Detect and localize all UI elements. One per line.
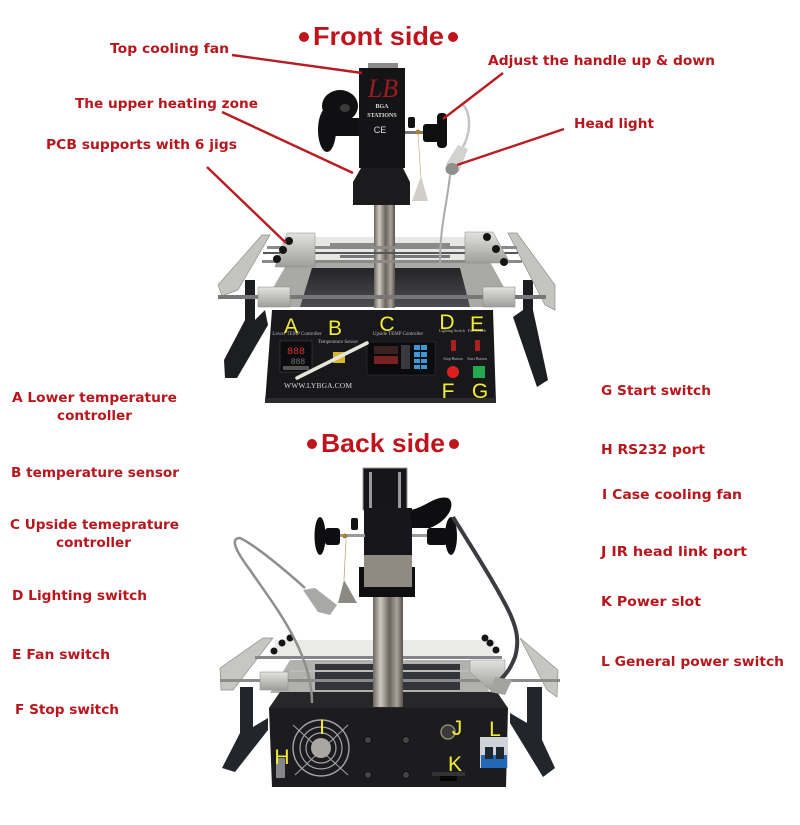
left legend: E Fan switch [12, 647, 110, 663]
front panel captions [272, 328, 487, 361]
back knob and handle right [410, 498, 457, 555]
right legend: G Start switch [601, 383, 711, 399]
front lift column pole [374, 205, 395, 308]
front letters A to G: B [328, 317, 342, 340]
right legend [600, 383, 784, 670]
callout labels: Adjust the handle up & down [488, 53, 715, 69]
front slider blocks [258, 232, 515, 307]
front panel captions: Upside TEMP Controller [373, 332, 423, 337]
front letters A to G: F [442, 380, 454, 403]
back lamp gooseneck [235, 538, 337, 703]
back letters H to L: I [319, 716, 325, 739]
lower temperature controller: 888 [287, 347, 305, 358]
front handle knob right [405, 113, 447, 148]
front panel captions: Fan Switch [468, 328, 486, 333]
back column pole [373, 587, 403, 707]
back letters H to L: L [489, 718, 501, 741]
front panel captions: Stop Button [443, 356, 463, 361]
back warning tag [338, 540, 357, 603]
front upper heating column [353, 63, 410, 205]
back letters H to L: J [452, 717, 462, 740]
upside temperature controller [367, 342, 435, 375]
lower temperature controller: 888 [291, 358, 305, 367]
title: back side: Back side [321, 428, 445, 458]
temperature sensor [297, 343, 367, 378]
callout labels: Top cooling fan [110, 41, 229, 57]
front machine [218, 63, 555, 403]
left legend [10, 390, 179, 718]
callout labels: PCB supports with 6 jigs [46, 137, 237, 153]
power socket [432, 772, 465, 781]
front letters A to G [284, 311, 488, 403]
right legend: L General power switch [601, 654, 784, 670]
cooling fan [293, 720, 349, 776]
front upper heating column: STATIONS [367, 113, 397, 119]
left legend: D Lighting switch [12, 588, 147, 604]
left legend: A Lower temperature [12, 390, 177, 406]
front letters A to G: A [284, 315, 298, 338]
right legend: I Case cooling fan [602, 487, 742, 503]
front control box [265, 310, 496, 403]
front rails and rods [218, 246, 546, 299]
front panel captions: Temperature Sensor [318, 340, 358, 345]
back IR link cable [453, 517, 517, 695]
back jig knobs [270, 634, 500, 654]
right legend: K Power slot [601, 594, 702, 610]
back control box [269, 692, 508, 787]
lower temperature controller [280, 341, 312, 372]
left legend: controller [56, 535, 131, 551]
front letters A to G: G [472, 380, 488, 403]
front handle knob left [318, 90, 359, 152]
switches and buttons [447, 340, 485, 378]
right legend: H RS232 port [601, 442, 706, 458]
callout labels: Head light [574, 116, 655, 132]
callout labels: The upper heating zone [75, 96, 258, 112]
front letters A to G: C [379, 313, 395, 336]
front jig knobs [273, 233, 508, 266]
back slider blocks [260, 660, 505, 690]
front warning tag [412, 134, 428, 201]
brand logo: LB [367, 74, 398, 103]
front frame legs [224, 280, 548, 387]
back knob left [314, 517, 365, 555]
front glass panel [300, 268, 470, 307]
head link port [441, 725, 455, 739]
front letters A to G: E [470, 313, 484, 336]
callout labels [46, 41, 715, 153]
front panel captions: Lighting Switch [439, 328, 465, 333]
back machine [220, 468, 560, 787]
front panel captions: Start Button [467, 356, 487, 361]
back letters H to L: H [274, 746, 290, 769]
back column head [359, 468, 415, 597]
front upper heating column: CE [374, 125, 386, 135]
left legend: controller [57, 408, 132, 424]
control keys [414, 345, 427, 369]
back letters H to L: K [448, 753, 462, 776]
title: front side: Front side [313, 21, 444, 51]
back outer rails [220, 638, 558, 697]
front website text: WWW.LYBGA.COM [284, 381, 352, 390]
back legs [222, 687, 555, 777]
callout lines [207, 55, 564, 243]
column text: BGA [375, 104, 389, 110]
back platform [220, 640, 560, 693]
back letters H to L [274, 716, 501, 776]
head light [440, 105, 469, 263]
left legend: C Upside temeprature [10, 517, 179, 533]
front letters A to G: D [439, 311, 455, 334]
power breaker [480, 737, 508, 768]
front outer rails [218, 233, 555, 310]
RS232 port [276, 758, 285, 778]
right legend: J IR head link port [600, 544, 748, 560]
case screws [364, 736, 410, 778]
front platform [262, 237, 515, 307]
front panel captions: Lower TEMP Controller [272, 332, 322, 337]
left legend: F Stop switch [15, 702, 119, 718]
left legend: B temperature sensor [11, 465, 179, 481]
